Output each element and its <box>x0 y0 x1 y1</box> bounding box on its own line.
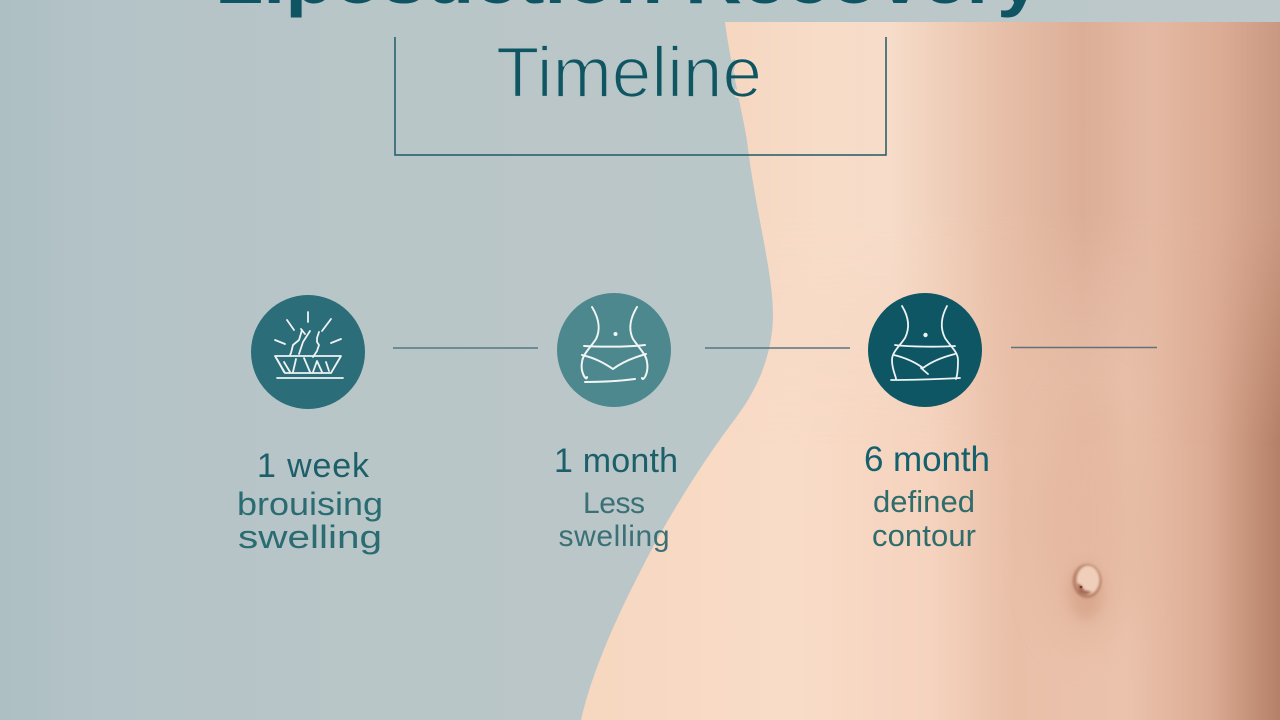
icon: bruising <box>251 295 365 409</box>
connector: after six months <box>1011 346 1157 348</box>
label: 1 month: 1 month <box>554 442 678 480</box>
stage: 6 months <box>864 293 990 553</box>
icon: waist, early <box>557 293 671 407</box>
stage: 1 week <box>237 295 383 555</box>
torso illustration <box>560 0 1280 720</box>
description: bruising swelling <box>237 486 383 555</box>
connector: week to month <box>393 347 538 349</box>
icon: waist, defined <box>868 293 982 407</box>
description: less swelling: swelling <box>558 520 670 553</box>
label: 1 week: 1 week <box>257 447 370 485</box>
description: less swelling <box>558 487 670 553</box>
description: defined contour: contour <box>872 518 976 553</box>
connector: month to six months <box>705 347 850 349</box>
description: bruising swelling: brouising <box>237 486 383 522</box>
description: less swelling: Less <box>583 487 645 520</box>
label: 6 month: 6 month <box>864 440 990 479</box>
title frame <box>395 37 886 155</box>
description: bruising swelling: swelling <box>238 519 382 555</box>
description: defined contour <box>872 484 976 553</box>
subtitle: Timeline <box>496 34 762 113</box>
description: defined contour: defined <box>873 484 975 519</box>
stage: 1 month <box>554 293 678 553</box>
icon: navel <box>1069 564 1103 620</box>
